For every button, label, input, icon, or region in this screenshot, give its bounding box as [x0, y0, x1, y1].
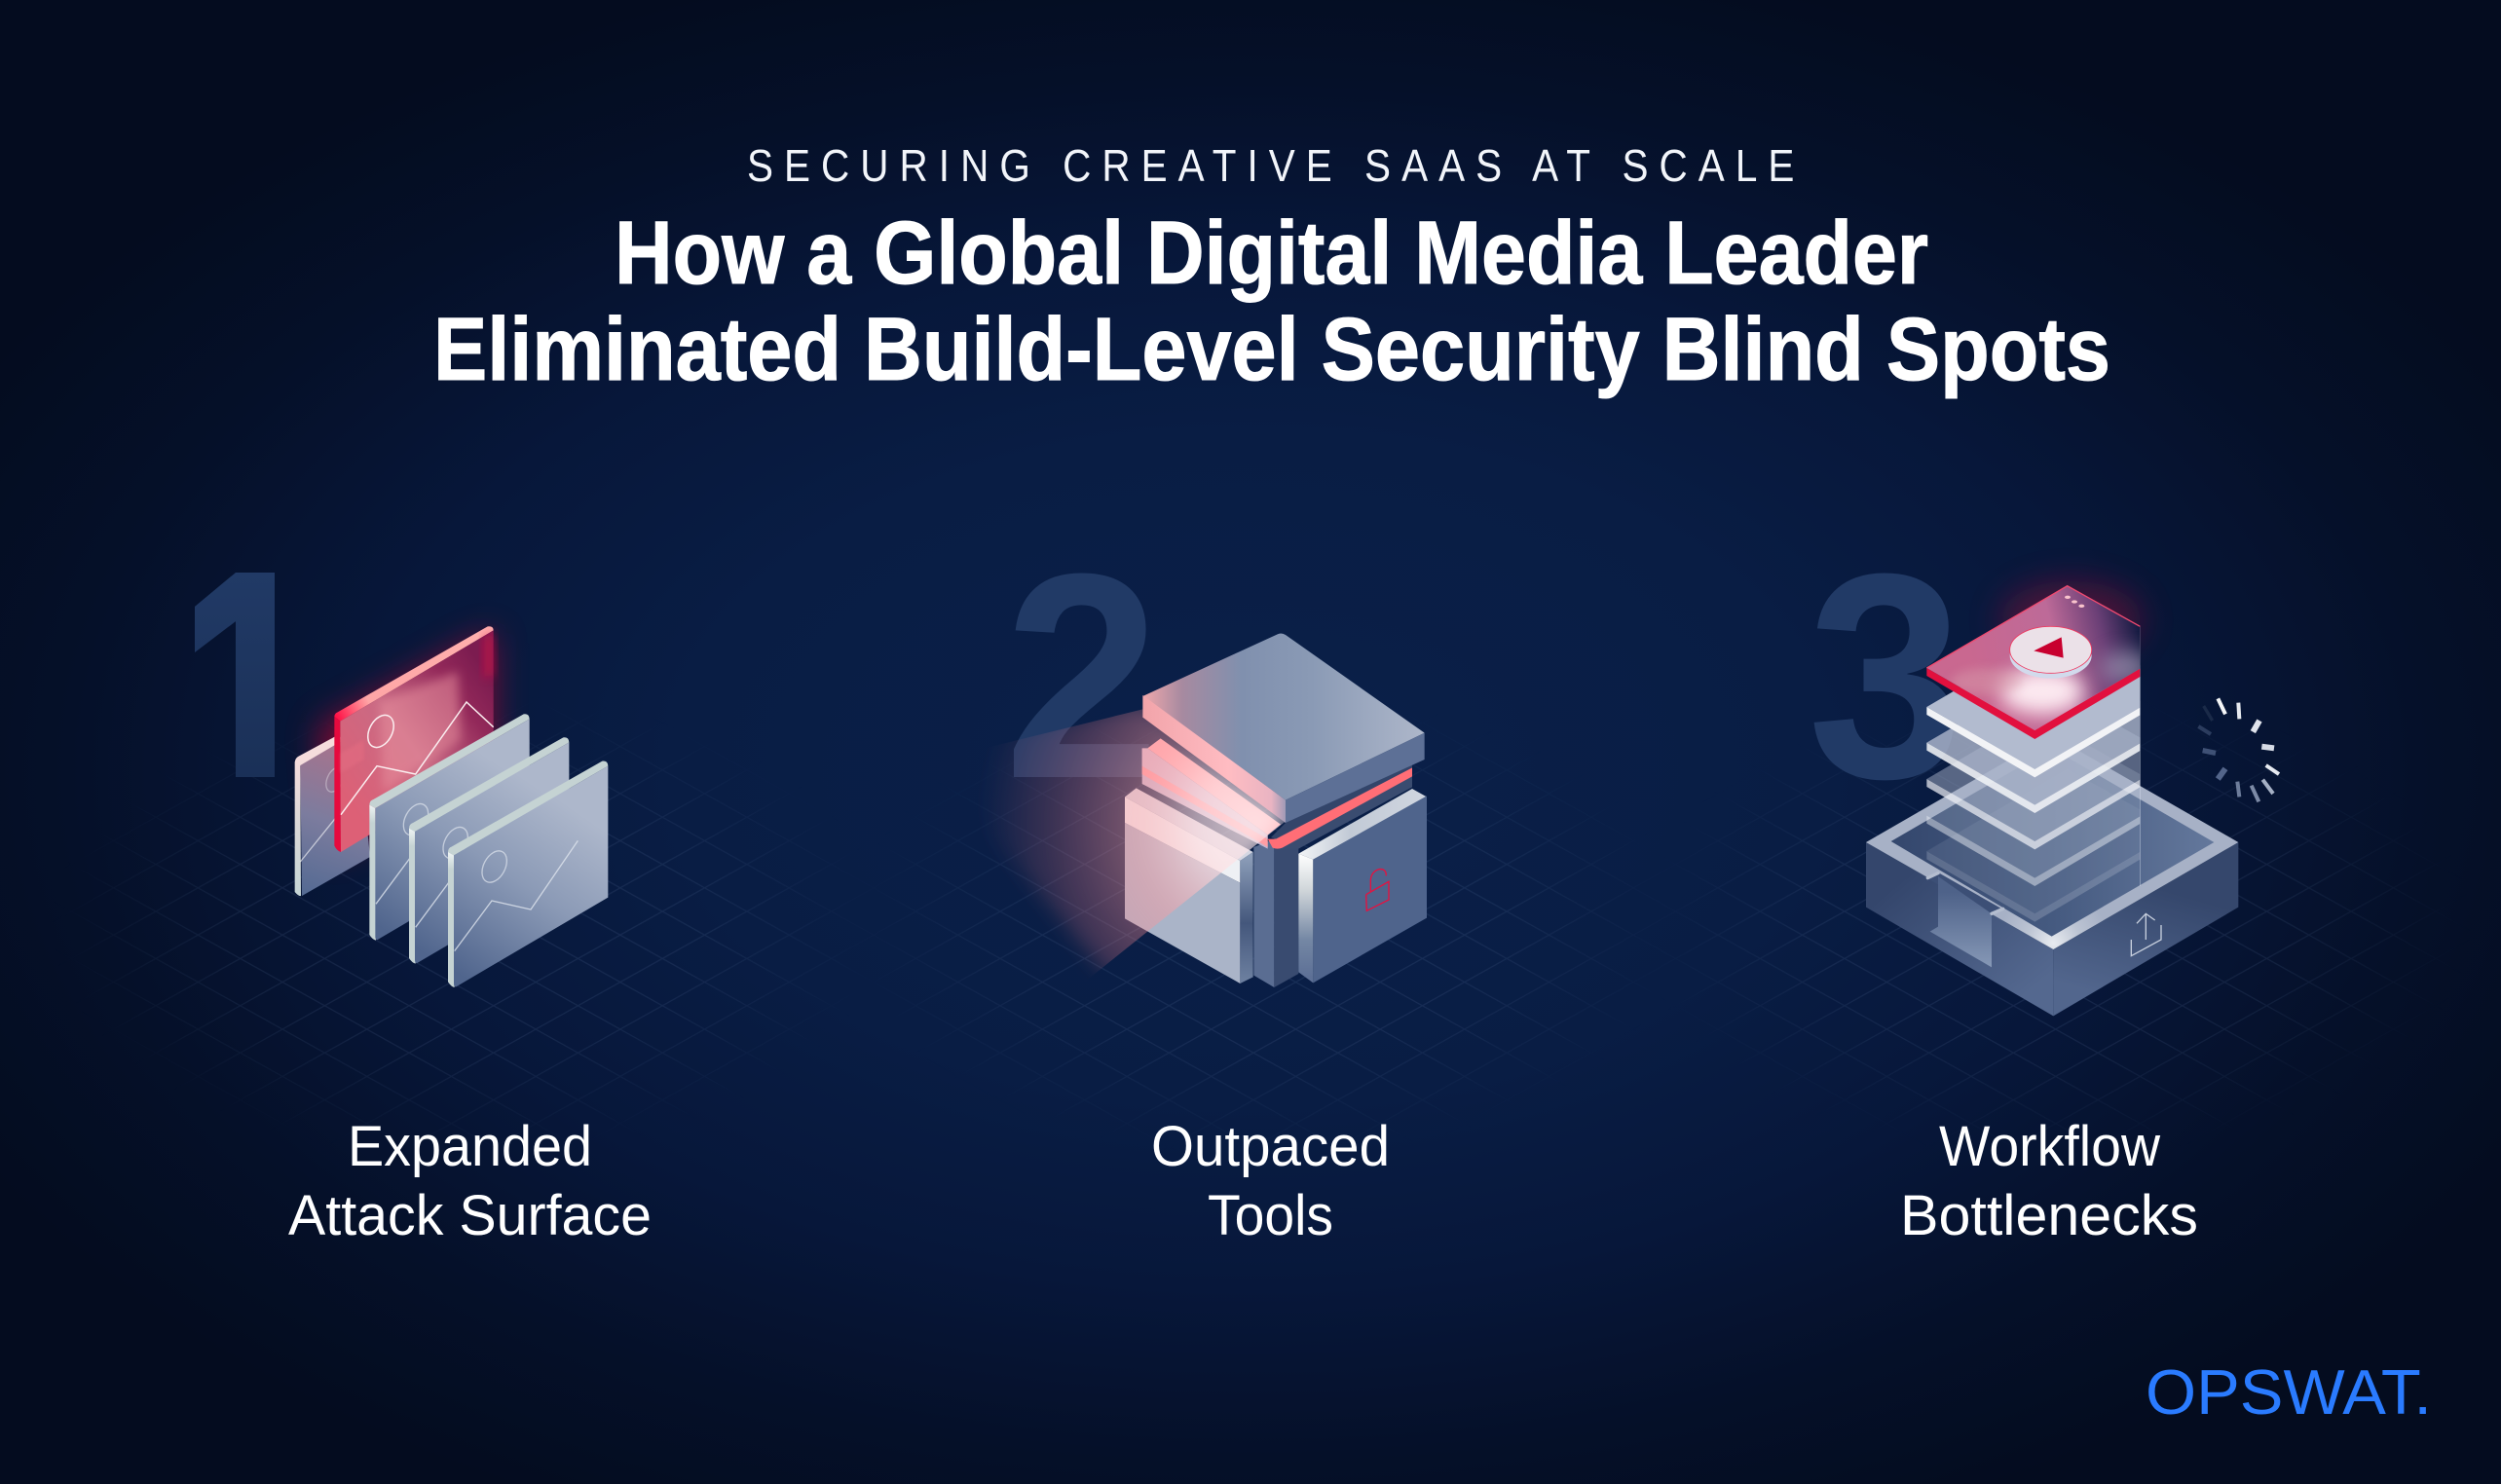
number 3: 3 [1808, 514, 1963, 839]
card 2 [369, 714, 530, 941]
translucent plate 1 [1926, 625, 2140, 777]
translucent plate 2 [1926, 660, 2140, 813]
icon: open lock [1366, 870, 1389, 910]
lid [1142, 633, 1425, 839]
panel: expanded attack surface [195, 573, 649, 1235]
video plate [1926, 586, 2152, 739]
tray base [1866, 735, 2238, 1016]
label: Tools [1208, 1184, 1333, 1247]
light beam [993, 709, 1285, 974]
play button [2010, 626, 2092, 679]
translucent plate 4 [1926, 733, 2140, 886]
panel: outpaced tools [993, 573, 1427, 1235]
label [288, 1115, 652, 1247]
card 3 [409, 737, 569, 964]
label: Outpaced [1151, 1115, 1390, 1178]
label: Bottlenecks [1900, 1184, 2198, 1247]
logo: OPSWAT: OPSWAT. [2146, 1356, 2432, 1428]
label [1900, 1115, 2198, 1247]
title: Eliminated Build-Level Security Blind Spots [433, 300, 2110, 399]
icon: stacked image cards [295, 626, 608, 987]
header [433, 142, 2110, 399]
icon: cracked security cube [967, 633, 1427, 1000]
label: Expanded [348, 1115, 592, 1178]
number 1: 1 [161, 512, 323, 839]
back card [295, 732, 370, 896]
central column [1253, 839, 1298, 987]
panel: workflow bottlenecks [1808, 514, 2279, 1247]
translucent plate 5 [1926, 769, 2140, 922]
icon: layered video stack on tray [1866, 581, 2279, 1016]
title [433, 204, 2110, 399]
translucent plate 3 [1926, 697, 2140, 849]
label [1151, 1115, 1390, 1247]
window dots [2065, 596, 2084, 608]
isometric floor grid [144, 758, 2386, 1104]
glass column edge [2139, 626, 2141, 886]
red highlighted card [334, 626, 494, 852]
loading spinner [2198, 698, 2279, 801]
red glow [1999, 581, 2143, 659]
icon: upload [2131, 913, 2161, 956]
label: Workflow [1939, 1115, 2161, 1178]
title: How a Global Digital Media Leader [615, 204, 1928, 303]
label: Attack Surface [288, 1184, 652, 1247]
exposed inner layers [1142, 738, 1412, 849]
eyebrow: SECURING CREATIVE SAAS AT SCALE [747, 142, 1794, 192]
right box with lock [1298, 789, 1427, 983]
card 4 [448, 761, 608, 987]
number 2: 2 [1004, 514, 1160, 839]
lower left box [1125, 788, 1253, 983]
